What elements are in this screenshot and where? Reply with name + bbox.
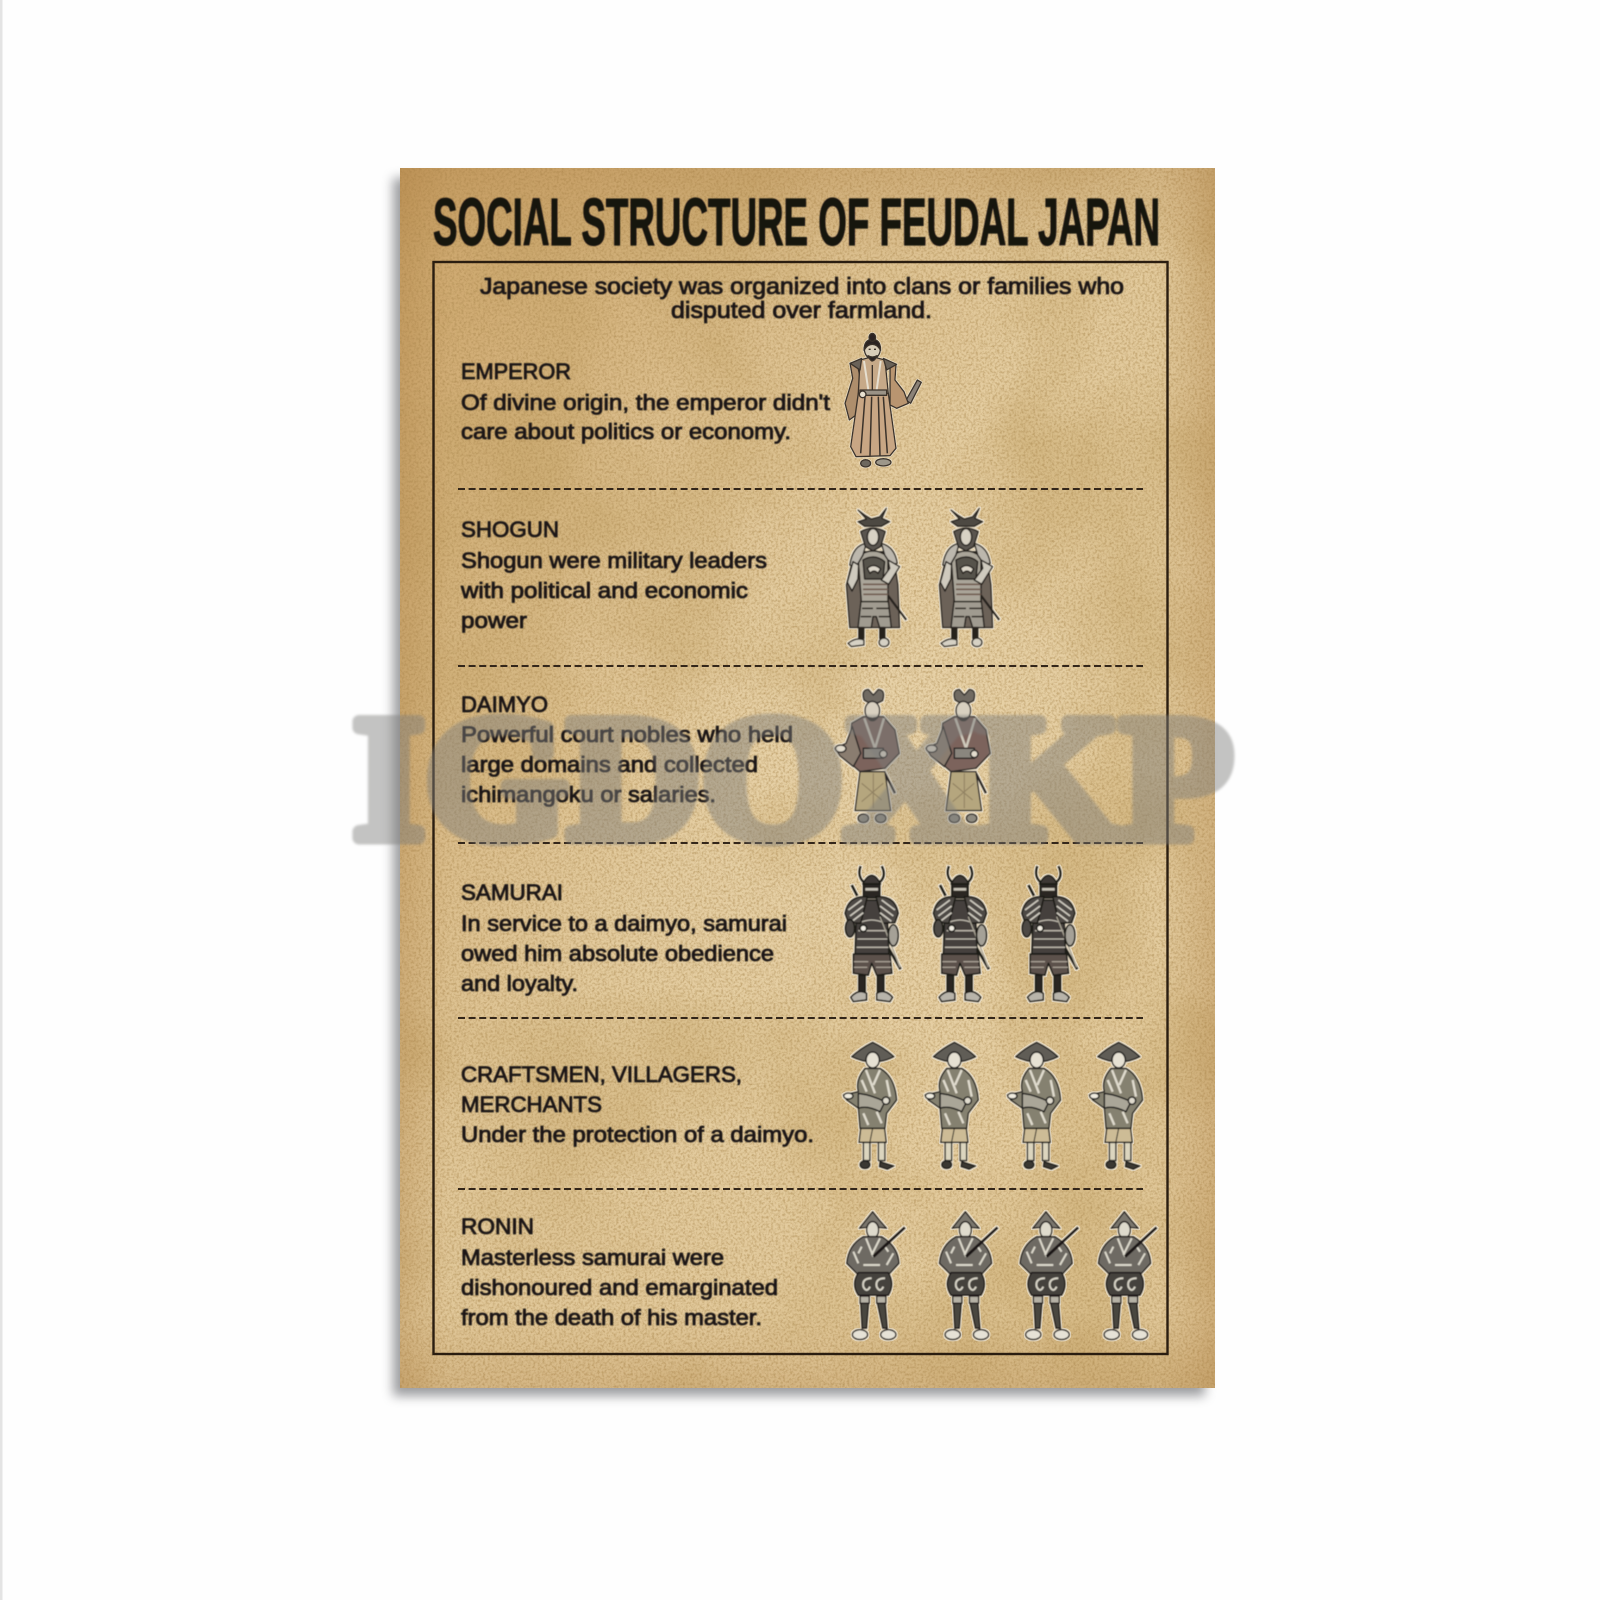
daimyo text: ichimangoku or salaries.	[461, 782, 716, 807]
section dividers	[458, 489, 1143, 1189]
icon: emperor figure	[845, 333, 921, 467]
intro text	[480, 273, 1124, 323]
samurai text: SAMURAI	[461, 880, 563, 905]
craftsmen text: Under the protection of a daimyo.	[461, 1122, 814, 1147]
panel: craftsmen, villagers, merchants	[461, 1042, 1143, 1169]
ronin text: Masterless samurai were	[461, 1245, 724, 1270]
icon: shogun figures	[846, 508, 999, 647]
shogun text: Shogun were military leaders	[461, 548, 767, 573]
emperor text: EMPEROR	[461, 359, 571, 384]
ronin text: dishonoured and emarginated	[461, 1275, 778, 1300]
shogun text	[460, 517, 767, 633]
panel: ronin	[461, 1212, 1157, 1340]
shogun text: power	[461, 608, 528, 633]
daimyo text: DAIMYO	[461, 692, 548, 717]
craftsmen text	[461, 1062, 814, 1147]
panel: samurai	[461, 866, 1077, 1002]
samurai text: In service to a daimyo, samurai	[461, 911, 787, 936]
intro text: Japanese society was organized into clans or families who	[480, 273, 1124, 299]
poster shadow	[393, 178, 1205, 1396]
craftsmen text: MERCHANTS	[461, 1092, 602, 1117]
content frame	[434, 262, 1168, 1354]
ronin text: from the death of his master.	[461, 1305, 762, 1330]
shogun text: SHOGUN	[461, 517, 559, 542]
daimyo text: Powerful court nobles who held	[461, 722, 793, 747]
emperor text: care about politics or economy.	[461, 419, 791, 444]
daimyo text	[461, 692, 793, 807]
intro text: disputed over farmland.	[671, 297, 932, 323]
emperor text	[461, 359, 831, 444]
panel: shogun	[460, 508, 999, 647]
emperor text: Of divine origin, the emperor didn't	[461, 390, 831, 415]
ronin text: RONIN	[461, 1214, 534, 1239]
samurai text: owed him absolute obedience	[461, 941, 774, 966]
samurai text: and loyalty.	[461, 971, 578, 996]
panel: parchment poster	[400, 168, 1215, 1388]
daimyo text: large domains and collected	[461, 752, 758, 777]
samurai text	[461, 880, 787, 996]
watermark: IGDOXKP	[353, 679, 1233, 877]
icon: ronin figures	[847, 1212, 1157, 1340]
shogun text: with political and economic	[460, 578, 748, 603]
ronin text	[461, 1214, 778, 1330]
panel: emperor	[461, 333, 921, 467]
icon: craftsmen figures	[843, 1042, 1143, 1169]
icon: samurai figures	[845, 866, 1077, 1002]
panel: daimyo	[461, 689, 990, 823]
icon: daimyo figures	[835, 689, 990, 823]
craftsmen text: CRAFTSMEN, VILLAGERS,	[461, 1062, 742, 1087]
